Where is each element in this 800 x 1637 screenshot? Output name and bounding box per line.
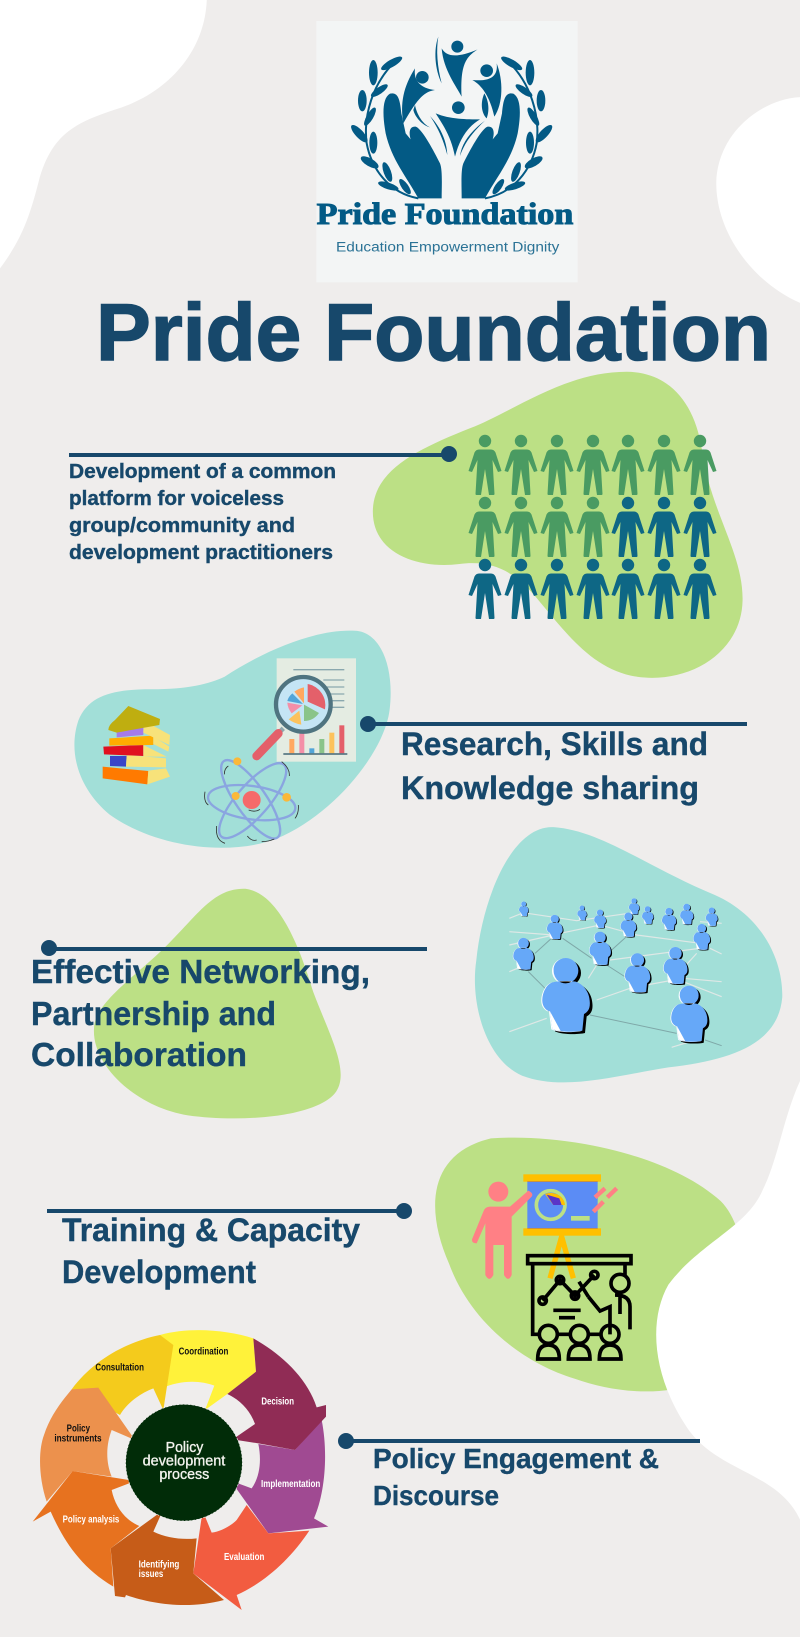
icon: research report with magnifier: [257, 658, 356, 762]
section 4: training heading: Training & Capacity: [62, 1212, 360, 1248]
section 1: common platform: development practitioners: [69, 542, 333, 564]
title: Pride Foundation: [96, 288, 771, 378]
wheel labels: Evaluation: [224, 1552, 264, 1563]
wheel labels: Identifying: [139, 1560, 179, 1571]
section 3: networking heading: Collaboration: [31, 1036, 247, 1073]
wheel labels: instruments: [54, 1433, 102, 1444]
wheel labels: issues: [139, 1569, 164, 1580]
icon: atom: [205, 753, 298, 847]
wheel labels: Policy: [67, 1424, 90, 1435]
wheel labels: [54, 1346, 320, 1580]
section 1: common platform: group/community and: [69, 515, 295, 537]
segment: implementation: [231, 1420, 328, 1533]
icon: presenter at board: [472, 1174, 631, 1359]
wheel labels: Coordination: [179, 1346, 228, 1357]
segment: evaluation: [193, 1505, 309, 1610]
segment: coordination: [160, 1330, 256, 1410]
section 3: networking heading: Effective Networking,: [31, 953, 370, 990]
segment: consultation: [72, 1335, 173, 1415]
segment: identifying issues: [111, 1511, 224, 1605]
section 2: research heading: [360, 716, 747, 806]
wheel labels: process: [159, 1467, 209, 1483]
section 4: training heading: [47, 1203, 412, 1290]
wheel labels: Policy analysis: [63, 1514, 120, 1525]
section 5: policy engagement heading: Discourse: [373, 1480, 499, 1511]
logo panel: Education Empowerment Dignity: [336, 240, 560, 255]
wheel labels: Decision: [261, 1397, 294, 1408]
section 1: common platform: Development of a common: [69, 461, 336, 483]
wheel labels: Implementation: [261, 1479, 320, 1490]
wheel labels: Consultation: [95, 1363, 144, 1374]
logo panel: Pride Foundation: [317, 197, 573, 231]
section 5: policy engagement heading: [338, 1433, 700, 1511]
segment: policy analysis: [33, 1471, 139, 1587]
section 1: common platform: [69, 446, 457, 564]
icon: stack of books: [103, 706, 170, 784]
segment: decision: [227, 1338, 326, 1450]
logo panel: [316, 21, 578, 282]
icon: people network: [509, 898, 722, 1047]
section 2: research heading: Knowledge sharing: [401, 770, 699, 806]
section 3: networking heading: Partnership and: [31, 995, 276, 1032]
chart: policy development process wheel: [33, 1330, 328, 1610]
section 3: networking heading: [31, 940, 427, 1073]
segment: policy instruments: [40, 1388, 135, 1502]
wheel labels: Policy: [166, 1440, 204, 1456]
section 4: training heading: Development: [62, 1254, 256, 1290]
section 5: policy engagement heading: Policy Engagement &: [373, 1443, 659, 1474]
icon: crowd of people: [468, 435, 716, 619]
wheel hub: [126, 1404, 242, 1521]
wheel labels: development: [143, 1453, 225, 1469]
section 1: common platform: platform for voiceless: [69, 488, 284, 510]
section 2: research heading: Research, Skills and: [401, 726, 708, 762]
